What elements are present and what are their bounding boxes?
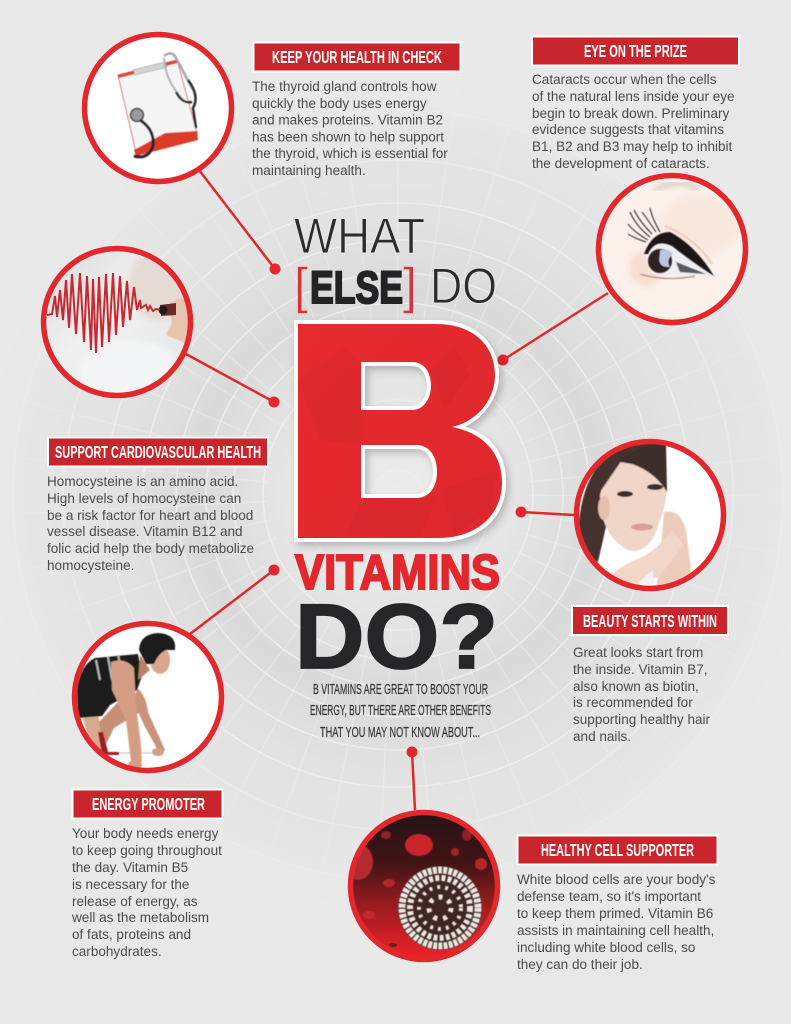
text: homocysteine: vessel disease. Vitamin B12 and [47,524,243,539]
text: vitamin B6: defense team, so it's important [517,889,701,904]
text: homocysteine: Homocysteine is an amino acid. [47,474,238,489]
text: vitamin B6: including white blood cells, so [517,940,695,955]
tagline: THAT YOU MAY NOT KNOW ABOUT... [320,725,480,741]
text: vitamin B5: carbohydrates. [72,944,162,959]
text: vitamin B6: assists in maintaining cell health, [517,923,714,938]
title: VITAMINS: VITAMINS [295,546,500,600]
text: biotin: also known as biotin, [573,679,699,694]
text: homocysteine [47,474,254,573]
photo circle: ECG heart [43,248,192,400]
heading: keep your health in check: KEEP YOUR HEALTH IN CHECK [272,47,442,67]
text: cataracts [532,72,735,171]
title: WHAT: WHAT [294,208,425,264]
photo circle: clipboard and stethoscope [84,34,232,182]
tagline: B VITAMINS ARE GREAT TO BOOST YOUR [313,682,488,698]
text: cataracts: Cataracts occur when the cells [532,72,717,87]
text: thyroid: and makes proteins. Vitamin B2 [252,112,443,128]
heading: support cardiovascular health: SUPPORT CARDIOVASCULAR HEALTH [55,442,261,462]
text: cataracts: begin to break down. Preliminary [532,106,730,121]
heading: eye on the prize: EYE ON THE PRIZE [584,41,687,61]
text: biotin: Great looks start from [573,645,703,660]
text: vitamin B5: Your body needs energy [72,826,219,841]
heading: beauty starts within [572,606,728,635]
text: biotin: is recommended for [573,695,693,710]
tagline [310,682,491,741]
text: vitamin B5: the day. Vitamin B5 [72,860,188,875]
text: biotin [573,645,711,744]
heading: eye on the prize [532,36,739,66]
heading: support cardiovascular health [48,438,268,466]
photo circle: white blood cell [343,812,498,960]
photo circle: woman [576,441,724,600]
text: vitamin B5: is necessary for the [72,877,189,892]
text: homocysteine: be a risk factor for heart and blood [47,508,253,523]
text: vitamin B5: release of energy, as [72,894,198,909]
heading: beauty starts within: BEAUTY STARTS WITHIN [583,611,717,631]
heading: keep your health in check [254,42,460,72]
text: cataracts: evidence suggests that vitamins [532,122,724,137]
text: thyroid: the thyroid, which is essential for [252,146,448,161]
text: vitamin B5: to keep going throughout [72,843,222,858]
heading: energy promoter [72,790,222,818]
title: [ELSE] DO [294,258,497,314]
text: vitamin B6: to keep them primed. Vitamin B6 [517,906,713,921]
tagline: ENERGY, BUT THERE ARE OTHER BENEFITS [310,703,491,719]
text: homocysteine: folic acid help the body metabolize [47,541,254,556]
photo circle: eye [598,175,746,323]
heading: energy promoter: ENERGY PROMOTER [92,794,205,814]
photo circle: runner [74,623,222,771]
background: radial grid [139,235,652,756]
text: vitamin B5: of fats, proteins and [72,927,191,942]
big letter B [295,321,505,541]
text: vitamin B6: they can do their job. [517,957,643,972]
text: homocysteine: High levels of homocysteine can [47,491,241,506]
title: [ELSE] DO: DO [430,258,497,314]
text: thyroid: quickly the body uses energy [252,96,427,111]
text: cataracts: the development of cataracts. [532,156,710,171]
title: [ELSE] DO: ELSE [310,262,403,313]
text: cataracts: B1, B2 and B3 may help to inhibit [532,139,733,154]
text: biotin: the inside. Vitamin B7, [573,662,708,677]
heading: healthy cell supporter [518,836,718,864]
text: biotin: and nails. [573,729,631,744]
text: vitamin B6: White blood cells are your body's [517,872,716,887]
text: vitamin B5 [71,826,222,959]
text: thyroid [252,79,448,178]
text: vitamin B6 [517,872,716,972]
text: thyroid: has been shown to help support [252,130,444,144]
text: biotin: supporting healthy hair [573,712,711,727]
connector lines and dots [186,170,608,810]
title: DO?: DO? [295,586,498,688]
text: thyroid: maintaining health. [252,163,366,178]
text: thyroid: The thyroid gland controls how [252,79,437,94]
text: homocysteine: homocysteine. [47,558,134,573]
text: vitamin B5: well as the metabolism [71,910,209,925]
heading: healthy cell supporter: HEALTHY CELL SUPPORTER [541,840,694,860]
title: [ELSE] DO: [ [294,258,308,314]
title: [ELSE] DO: ] [403,258,417,314]
text: cataracts: of the natural lens inside your eye [532,89,735,104]
